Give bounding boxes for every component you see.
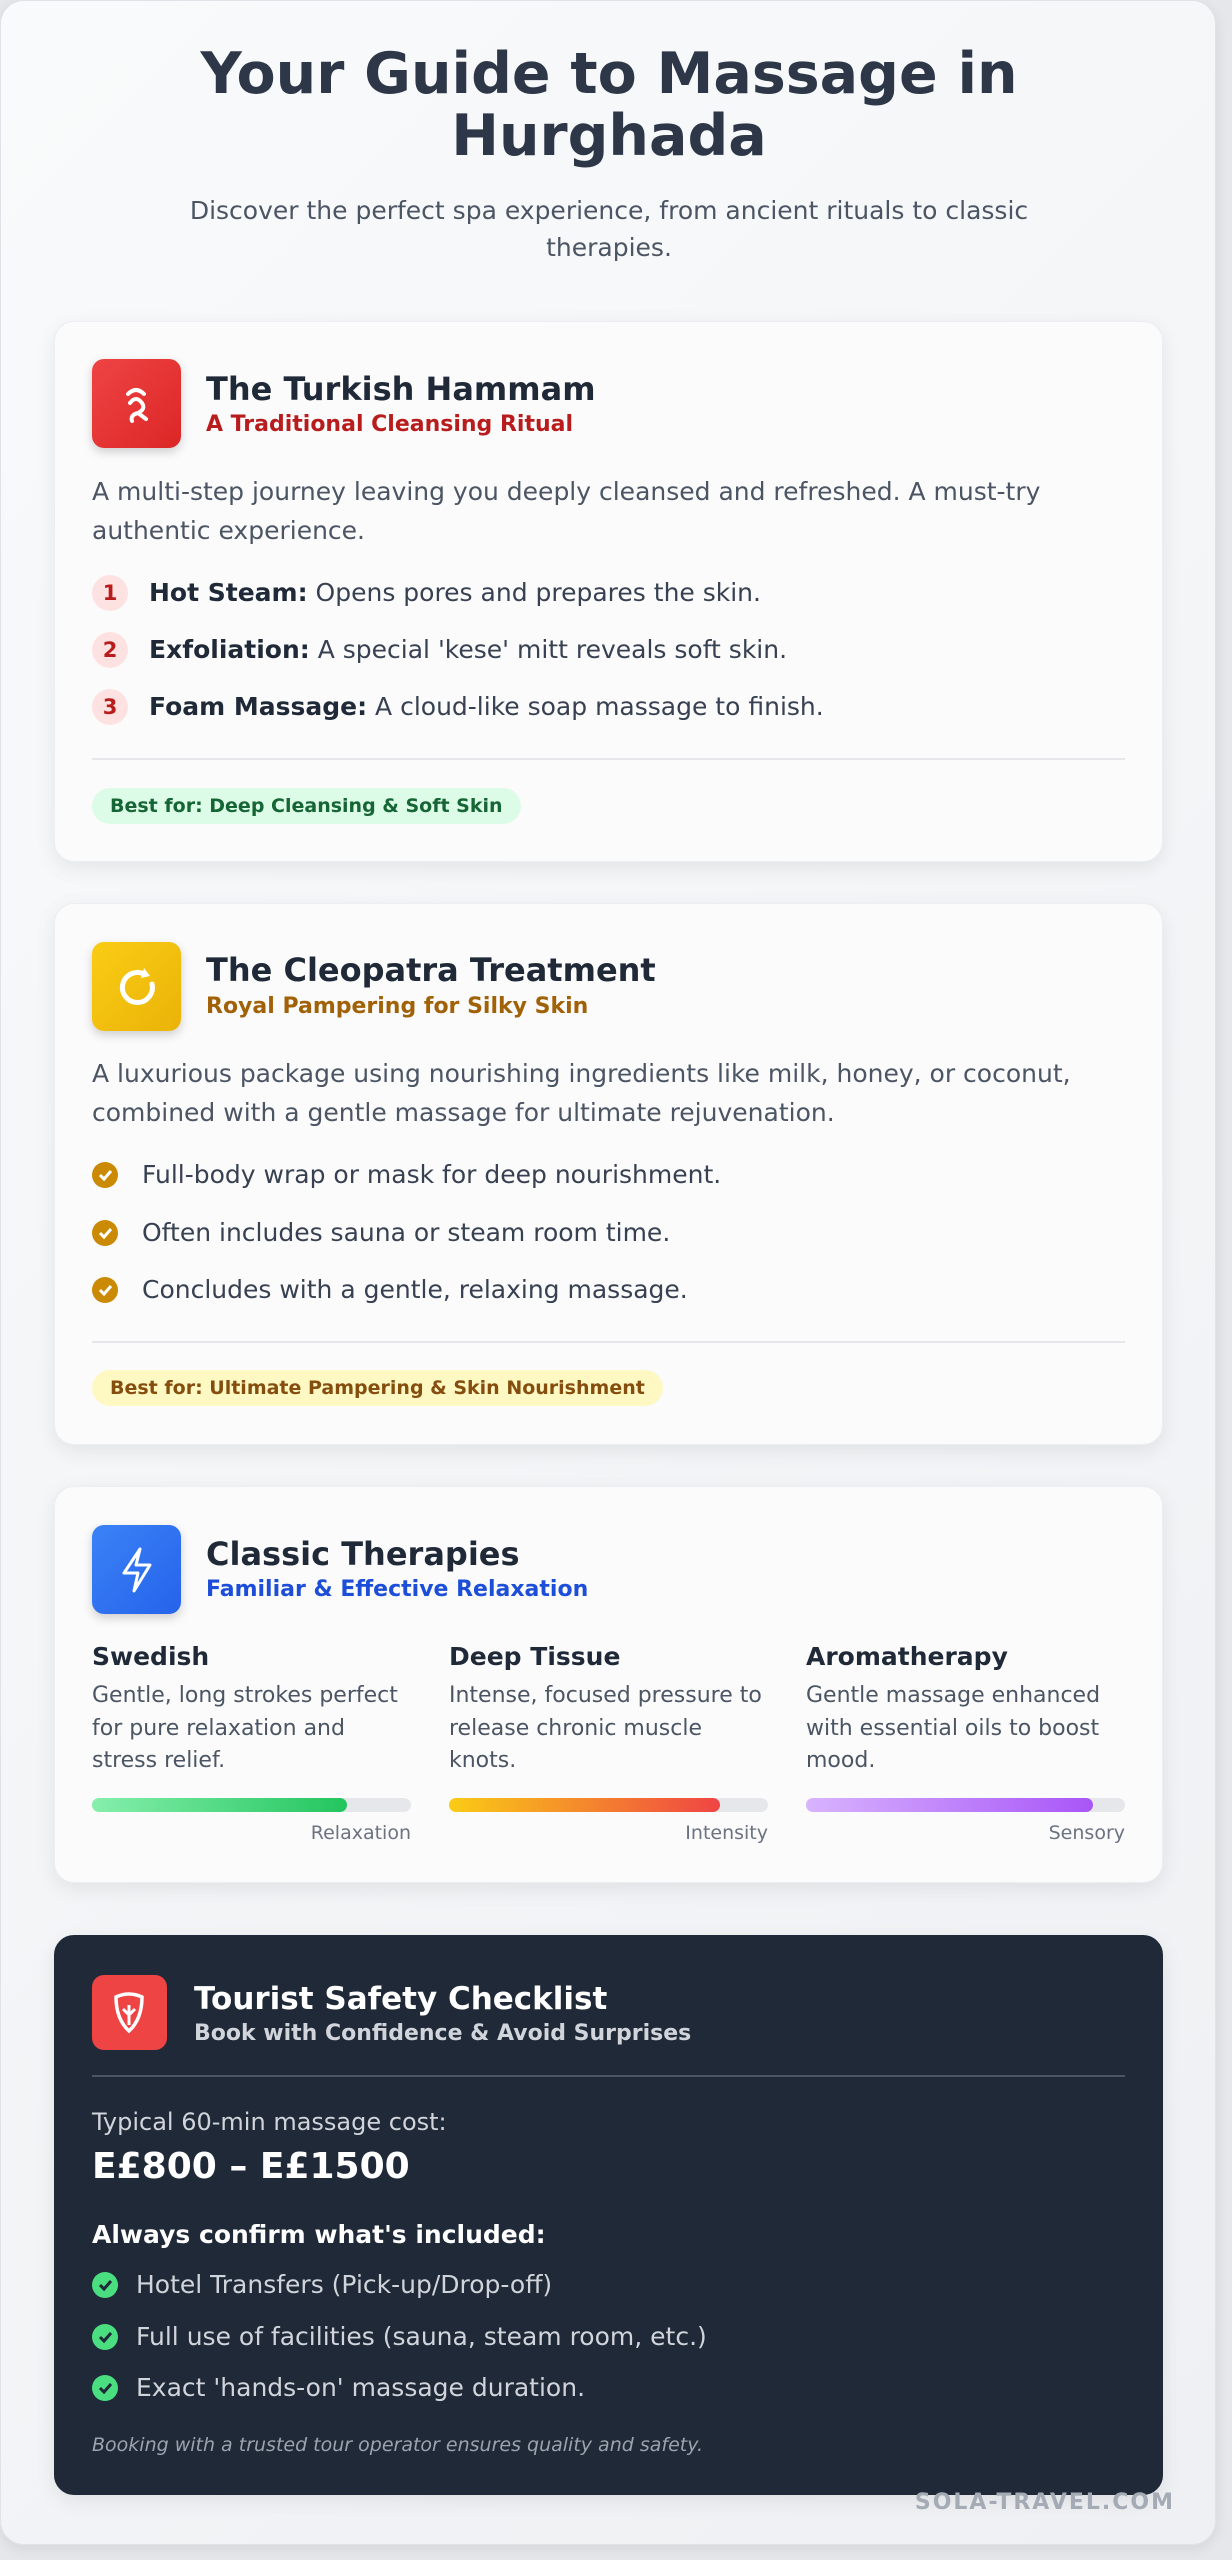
icon: lightning <box>92 1525 181 1614</box>
column: swedish: Swedish <box>92 1642 209 1671</box>
subheading: Royal Pampering for Silky Skin <box>206 994 588 1019</box>
item 1 <box>92 1160 721 1189</box>
checklist: Concludes with a gentle, relaxing massage. <box>142 1275 688 1304</box>
bar: intensity <box>449 1798 768 1812</box>
column: aromatherapy: with essential oils to boost <box>806 1716 1099 1740</box>
confirm heading: Always confirm what's included: <box>92 2220 546 2249</box>
included list <box>92 2270 707 2402</box>
item 3 <box>92 1275 688 1304</box>
heading: Classic Therapies <box>206 1535 520 1573</box>
steps list: 3 <box>103 695 117 719</box>
column: swedish <box>92 1642 398 1773</box>
panel: cleopatra <box>54 903 1163 1445</box>
badge <box>92 1370 663 1406</box>
badge <box>92 788 521 824</box>
icon: hammam <box>92 359 181 448</box>
watermark: SOLA-TRAVEL.COM <box>915 2490 1175 2515</box>
steps list <box>92 575 824 725</box>
column: deep tissue <box>449 1642 762 1773</box>
steps list: Foam Massage: A cloud-like soap massage to finish. <box>149 692 824 721</box>
subtitle: Discover the perfect spa experience, from ancient rituals to classic <box>190 196 1028 225</box>
column: deep tissue: Intense, focused pressure to <box>449 1683 762 1708</box>
panel: safety checklist <box>54 1935 1163 2495</box>
column: swedish: stress relief. <box>92 1748 225 1773</box>
item: facilities <box>92 2322 707 2351</box>
column: deep tissue: Deep Tissue <box>449 1642 620 1671</box>
column: swedish: for pure relaxation and <box>92 1716 345 1740</box>
title: Hurghada <box>451 103 767 169</box>
item: duration <box>92 2373 585 2402</box>
cost label: Typical 60-min massage cost: <box>92 2108 447 2136</box>
subtitle <box>190 196 1028 262</box>
badge: Best for: Deep Cleansing & Soft Skin <box>110 795 503 817</box>
footnote: Booking with a trusted tour operator ensures quality and safety. <box>92 2434 703 2456</box>
heading: Tourist Safety Checklist <box>194 1981 607 2017</box>
description: authentic experience. <box>92 516 365 545</box>
item 2 <box>92 1218 670 1247</box>
badge: Best for: Ultimate Pampering & Skin Nourishment <box>110 1377 645 1399</box>
bar: relaxation <box>92 1798 411 1812</box>
title: Your Guide to Massage in <box>200 41 1018 107</box>
checklist: Often includes sauna or steam room time. <box>142 1218 670 1247</box>
description: A luxurious package using nourishing ingredients like milk, honey, or coconut, <box>92 1059 1071 1088</box>
heading: The Cleopatra Treatment <box>206 951 656 989</box>
description: A multi-step journey leaving you deeply cleansed and refreshed. A must-try <box>92 477 1040 506</box>
included list: Hotel Transfers (Pick-up/Drop-off) <box>136 2270 552 2299</box>
step 1 <box>92 575 761 611</box>
column: aromatherapy: mood. <box>806 1748 875 1773</box>
subheading: Book with Confidence & Avoid Surprises <box>194 2021 691 2046</box>
step 2 <box>92 632 787 668</box>
included list: Full use of facilities (sauna, steam room, etc.) <box>136 2322 707 2351</box>
checklist: Full-body wrap or mask for deep nourishment. <box>142 1160 721 1189</box>
subheading: A Traditional Cleansing Ritual <box>206 412 573 437</box>
item: transfers <box>92 2270 552 2299</box>
subtitle: therapies. <box>546 233 672 262</box>
icon: cleopatra <box>92 942 181 1031</box>
column: aromatherapy <box>806 1642 1100 1773</box>
column: swedish: Gentle, long strokes perfect <box>92 1683 398 1708</box>
step 3 <box>92 689 824 725</box>
panel: classic therapies <box>54 1486 1163 1883</box>
column: aromatherapy: Aromatherapy <box>806 1642 1008 1671</box>
panel: turkish hammam <box>54 321 1163 862</box>
bar labels: Intensity <box>685 1822 768 1844</box>
column: deep tissue: release chronic muscle <box>449 1716 702 1740</box>
heading: The Turkish Hammam <box>206 370 596 408</box>
steps list: 1 <box>103 581 117 605</box>
included list: Exact 'hands-on' massage duration. <box>136 2373 585 2402</box>
steps list: Hot Steam: Opens pores and prepares the skin. <box>149 578 761 607</box>
checklist <box>92 1160 721 1304</box>
column: aromatherapy: Gentle massage enhanced <box>806 1683 1100 1708</box>
steps list: Exfoliation: A special 'kese' mitt reveals soft skin. <box>149 635 787 664</box>
description <box>92 477 1040 545</box>
steps list: 2 <box>103 638 117 662</box>
bar labels <box>311 1822 1125 1844</box>
title <box>200 41 1018 169</box>
bar: sensory <box>806 1798 1125 1812</box>
subheading: Familiar & Effective Relaxation <box>206 1577 588 1602</box>
description <box>92 1059 1071 1127</box>
icon: shield <box>92 1975 167 2050</box>
price: E£800 – E£1500 <box>92 2146 410 2187</box>
description: combined with a gentle massage for ultimate rejuvenation. <box>92 1098 835 1127</box>
bar labels: Sensory <box>1049 1822 1125 1844</box>
column: deep tissue: knots. <box>449 1748 516 1773</box>
bar labels: Relaxation <box>311 1822 411 1844</box>
